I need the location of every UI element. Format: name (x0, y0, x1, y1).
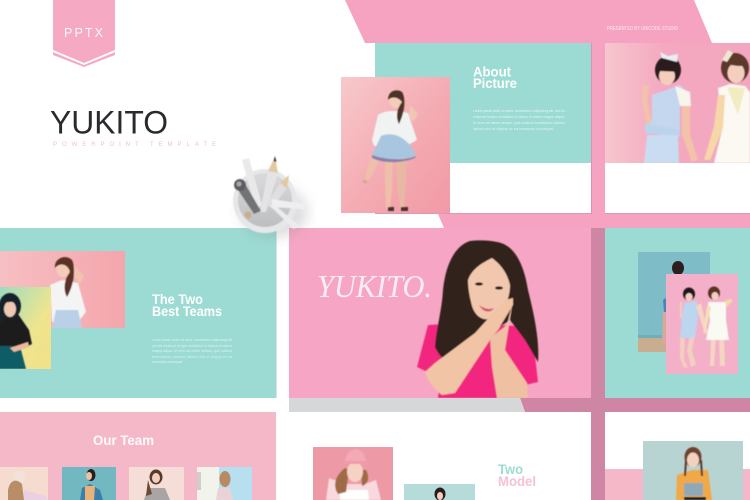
pptx ribbon badge (53, 0, 115, 67)
pencil with wood tip (260, 171, 278, 212)
heading: two model (498, 462, 536, 489)
photo: girl with braids (643, 441, 743, 500)
white pencil (242, 158, 262, 210)
body text: laboris nisi ut aliquip ex ea commodo consequat. (473, 127, 554, 131)
heading: yukito wordmark: YUKITO. (317, 268, 432, 304)
body text: magna aliqua. Ut enim ad minim veniam, quis nostrud (152, 349, 232, 353)
panel: two best teams slide (0, 228, 277, 398)
body text: Ut enim ad minim veniam, quis nostrud exercitation ullamco (473, 121, 565, 125)
team photo 4 (197, 467, 252, 500)
title: YUKITO (50, 104, 168, 140)
body text: exercitation ullamco laboris nisi ut aliquip ex ea (152, 355, 232, 359)
panel: our team slide (0, 412, 276, 500)
short pencil (266, 183, 287, 208)
photo: girl in pink cap (313, 447, 393, 500)
pptx label: PPTX (64, 26, 104, 40)
team photo 3 (129, 467, 184, 500)
photo: blue backdrop (638, 252, 710, 352)
body text (473, 109, 565, 131)
photo: girl in white blouse (341, 77, 450, 213)
body text: Lorem ipsum dolor sit amet, consectetur adipiscing elit, (152, 338, 233, 342)
photo: second model (404, 484, 475, 500)
subtitle: POWERPOINT TEMPLATE (53, 142, 216, 148)
heading: two model: Two (498, 462, 523, 477)
panel: duo photo slide (605, 43, 750, 214)
white pens (272, 199, 304, 209)
photo: two girls pink backdrop (666, 274, 738, 374)
body text (152, 338, 233, 364)
heading: about picture: Picture (473, 76, 517, 91)
team photo 1 (0, 467, 48, 500)
photo: girl in black top (0, 287, 51, 369)
presented by label: PRESENTED BY UNICODE STUDIO (607, 26, 678, 32)
body text: sed do eiusmod tempor incididunt ut labore et dolore (152, 344, 232, 348)
heading: about picture: About (473, 64, 511, 80)
heading: about picture (473, 64, 517, 91)
heading: two model: Model (498, 474, 536, 489)
icon: pencil holder (233, 156, 308, 238)
dark pen (236, 182, 261, 214)
panel: bottom right slide (605, 441, 750, 500)
panel: about picture slide (341, 43, 592, 214)
pink background band (345, 0, 750, 228)
photo: main girl (417, 240, 538, 398)
heading: the two best teams: The Two (152, 292, 203, 307)
heading: the two best teams (152, 292, 222, 319)
team photo 2 (62, 467, 116, 500)
heading: the two best teams: Best Teams (152, 304, 222, 319)
panel: teal two photos slide (605, 228, 750, 398)
panel: two model slide (313, 447, 536, 500)
body text: commodo consequat. (152, 360, 183, 364)
body text: eiusmod tempor incididunt ut labore et dolore magna aliqua. (473, 115, 565, 119)
panel: main yukito slide (289, 228, 591, 398)
photo: girl posing (0, 251, 125, 328)
darker shaded gutter (289, 228, 750, 500)
heading: our team: Our Team (93, 433, 154, 448)
body text: Lorem ipsum dolor sit amet, consectetur adipiscing elit, sed do (473, 109, 565, 113)
photo: two girls (605, 43, 750, 163)
